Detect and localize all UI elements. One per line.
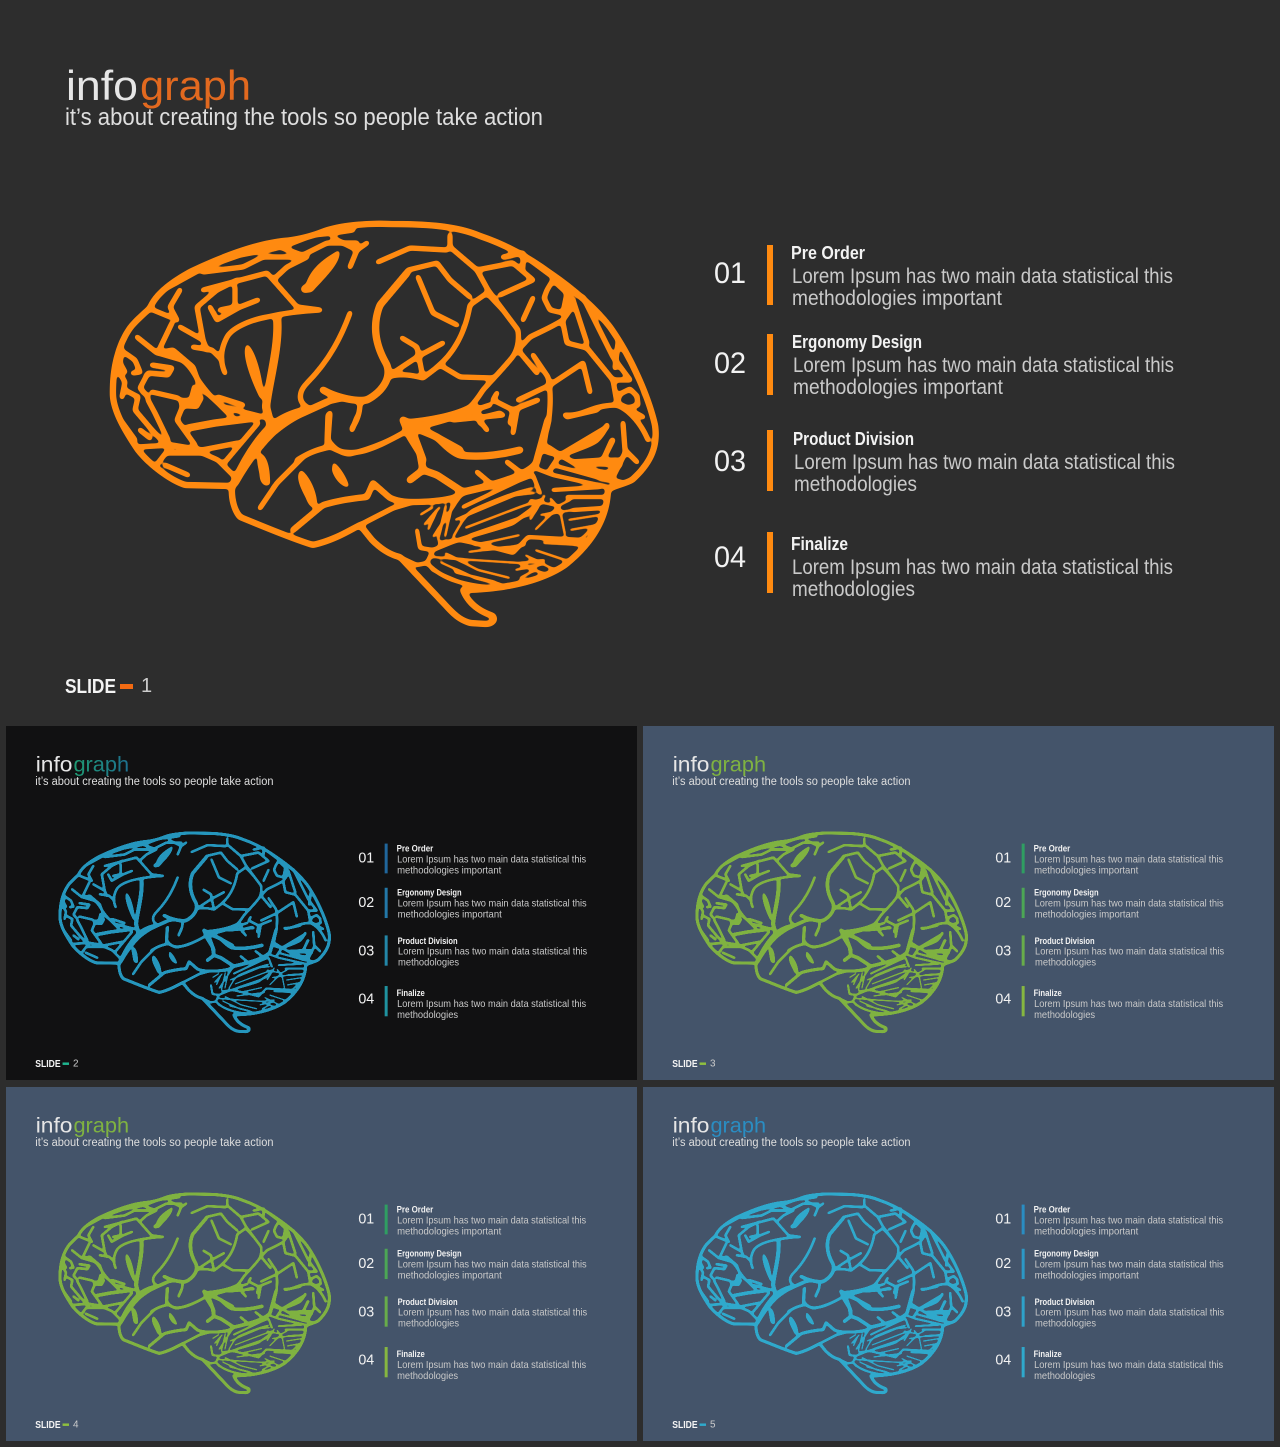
slide number: SLIDE [35,1420,61,1431]
list item 01: Pre Order [1034,1205,1071,1215]
list item 01 [714,243,1173,310]
list item 04: Finalize [397,1349,425,1359]
list item 03: methodologies [398,1319,459,1330]
list item 02: 02 [995,895,1011,911]
list item 02 [995,1249,1224,1282]
panel: slide 3 [643,726,1274,1080]
list item 03: 03 [995,1305,1011,1321]
slide number [35,1058,79,1070]
list item 02: Ergonomy Design [1034,888,1099,898]
list item 01: Pre Order [791,243,865,263]
list item 04 [358,1347,586,1382]
list item 02: methodologies important [1035,1271,1139,1282]
list item 02: 02 [995,1256,1011,1272]
slide number: 5 [710,1419,716,1430]
slide number: SLIDE [35,1059,61,1070]
list item 01: Lorem Ipsum has two main data statistical this [1034,1215,1223,1226]
list item 04: Lorem Ipsum has two main data statistical this [792,556,1173,579]
list item 02: methodologies important [793,376,1003,399]
list item 01: 01 [358,850,374,866]
list item 04: Lorem Ipsum has two main data statistical this [1034,1360,1223,1371]
list item 03: Product Division [1035,1297,1095,1307]
list item 03: methodologies [1035,958,1096,969]
subtitle: it’s about creating the tools so people take action [35,774,273,788]
list item 04: methodologies [397,1371,458,1382]
list item 01: Pre Order [397,1205,434,1215]
title: graph [140,62,251,109]
list item 03: Lorem Ipsum has two main data statistical this [398,1308,587,1319]
title [36,1115,129,1138]
title: info [66,62,138,109]
list item 01: Lorem Ipsum has two main data statistical this [792,265,1173,288]
panel: slide 1 [65,62,1175,698]
list item 01: methodologies important [1034,1226,1138,1237]
slide number [35,1419,79,1431]
list item 02: Lorem Ipsum has two main data statistical this [1035,899,1224,910]
title: info [673,754,709,777]
list item 03 [714,429,1175,496]
list item 03: Lorem Ipsum has two main data statistical this [1035,1308,1224,1319]
list item 04: methodologies [1034,1010,1095,1021]
list item 03 [995,1296,1224,1330]
list item 02: methodologies important [398,910,502,921]
list item 02: Lorem Ipsum has two main data statistical this [398,899,587,910]
list item 02: methodologies important [398,1271,502,1282]
list item 02 [995,888,1224,921]
subtitle: it’s about creating the tools so people take action [35,1135,273,1149]
panel: slide 4 [6,1087,637,1441]
list item 03: methodologies [794,473,917,496]
list item 03: Lorem Ipsum has two main data statistical this [1035,947,1224,958]
title [36,754,129,777]
slide number: 1 [141,675,152,697]
slide number: SLIDE [672,1059,698,1070]
list item 03: Product Division [398,1297,458,1307]
list item 01 [995,844,1223,876]
list item 02: Ergonomy Design [1034,1249,1099,1259]
list item 02 [714,332,1174,399]
title: info [36,754,72,777]
list item 01: Lorem Ipsum has two main data statistical this [397,1215,586,1226]
list item 02: Lorem Ipsum has two main data statistical this [1035,1260,1224,1271]
list item 01 [995,1205,1223,1237]
slide number: 2 [73,1058,79,1069]
list item 01: Lorem Ipsum has two main data statistical this [397,854,586,865]
list item 04 [995,986,1223,1021]
list item 02: 02 [714,347,746,380]
list item 03: Lorem Ipsum has two main data statistical this [398,947,587,958]
list item 04: methodologies [792,578,915,601]
list item 01: Lorem Ipsum has two main data statistical this [1034,854,1223,865]
list item 04: methodologies [1034,1371,1095,1382]
panel: slide 5 [643,1087,1274,1441]
list item 04: 04 [714,541,746,574]
list item 01: 01 [995,1211,1011,1227]
slide number [672,1058,716,1070]
icon: brain [697,1194,966,1393]
title [673,1115,766,1138]
list item 03: 03 [358,944,374,960]
title: graph [73,754,129,777]
list item 03: 03 [995,944,1011,960]
title: info [673,1115,709,1138]
list item 04 [995,1347,1223,1382]
list item 02: Ergonomy Design [792,332,922,352]
list item 02: Ergonomy Design [397,888,462,898]
list item 01: methodologies important [1034,865,1138,876]
list item 01: methodologies important [397,865,501,876]
list item 02 [358,888,587,921]
icon: brain [60,833,329,1032]
list item 04: Finalize [397,988,425,998]
list item 01 [358,844,586,876]
list item 03: Lorem Ipsum has two main data statistical this [794,451,1175,474]
list item 04: Finalize [1034,1349,1062,1359]
list item 04: Lorem Ipsum has two main data statistical this [1034,999,1223,1010]
list item 03 [995,935,1224,969]
slide number: 4 [73,1419,79,1430]
list item 01: Pre Order [397,844,434,854]
title: graph [710,754,766,777]
subtitle: it’s about creating the tools so people take action [672,1135,910,1149]
list item 02: 02 [358,895,374,911]
list item 04: Finalize [791,534,848,554]
list item 04: Lorem Ipsum has two main data statistical this [397,1360,586,1371]
title [673,754,766,777]
list item 02: Lorem Ipsum has two main data statistical this [793,354,1174,377]
title: graph [710,1115,766,1138]
list item 01: 01 [714,257,746,290]
panel: slide 2 [6,726,637,1080]
list item 01: Pre Order [1034,844,1071,854]
slide number [65,675,152,698]
list item 03: 03 [714,445,746,478]
slide number: SLIDE [65,676,116,698]
title: info [36,1115,72,1138]
list item 03: methodologies [398,958,459,969]
list item 04: 04 [995,1352,1011,1368]
list item 04 [714,532,1173,601]
list item 01: 01 [995,850,1011,866]
list item 01: methodologies important [792,287,1002,310]
list item 04 [358,986,586,1021]
icon: brain [60,1194,329,1393]
list item 02 [358,1249,587,1282]
list item 04: Finalize [1034,988,1062,998]
list item 03: Product Division [398,936,458,946]
list item 01: 01 [358,1211,374,1227]
slide number: 3 [710,1058,716,1069]
list item 04: Lorem Ipsum has two main data statistical this [397,999,586,1010]
list item 04: methodologies [397,1010,458,1021]
list item 01 [358,1205,586,1237]
icon: brain [697,833,966,1032]
list item 04: 04 [358,1352,374,1368]
list item 02: 02 [358,1256,374,1272]
list item 02: Ergonomy Design [397,1249,462,1259]
list item 04: 04 [995,991,1011,1007]
subtitle: it’s about creating the tools so people take action [65,104,543,131]
list item 03: Product Division [1035,936,1095,946]
list item 03: 03 [358,1305,374,1321]
list item 02: Lorem Ipsum has two main data statistical this [398,1260,587,1271]
list item 03 [358,935,587,969]
slide number: SLIDE [672,1420,698,1431]
icon: brain [113,224,656,624]
subtitle: it’s about creating the tools so people take action [672,774,910,788]
title [66,62,251,109]
slide number [672,1419,716,1431]
list item 02: methodologies important [1035,910,1139,921]
list item 01: methodologies important [397,1226,501,1237]
list item 03: methodologies [1035,1319,1096,1330]
list item 03 [358,1296,587,1330]
list item 03: Product Division [793,429,914,449]
title: graph [73,1115,129,1138]
list item 04: 04 [358,991,374,1007]
